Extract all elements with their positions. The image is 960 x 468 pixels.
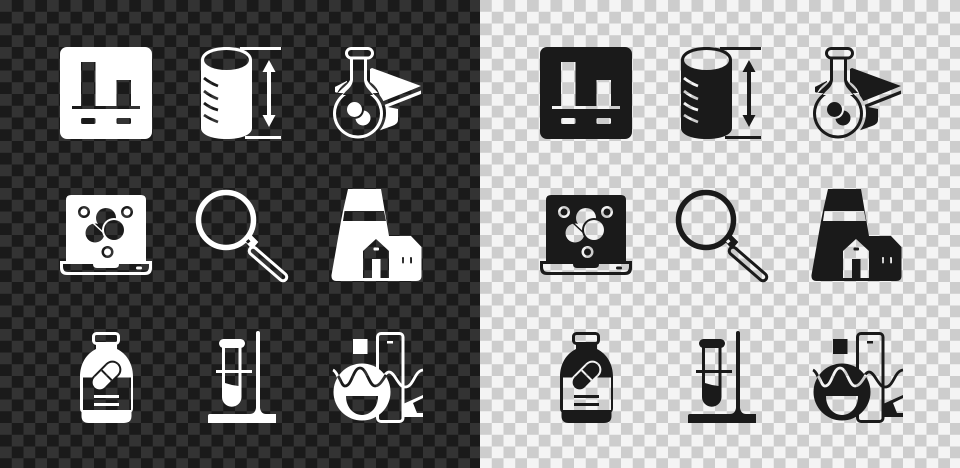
icon: cooling tower and plant, dark: [811, 189, 902, 281]
dark checkerboard panel: [0, 0, 480, 468]
icon: measuring cylinder with height arrow, dark: [681, 47, 761, 139]
icon: flask with graduation cap: [333, 47, 421, 138]
icon: medicine bottle: [80, 332, 133, 423]
icon: magnifying glass, dark: [676, 190, 768, 282]
icon: test tube on stand: [208, 331, 276, 423]
icon: magnifying glass: [196, 190, 288, 282]
light checkerboard panel: [480, 0, 960, 468]
icon: cooling tower and plant: [331, 189, 422, 281]
icon: test tube on stand, dark: [688, 331, 756, 423]
icon: laptop with molecules: [60, 195, 152, 275]
icon: bar chart tile, dark: [540, 47, 632, 139]
icon: laptop with molecules, dark: [540, 195, 632, 275]
icon: flask with wave, phone and plant: [332, 332, 424, 423]
icon: medicine bottle, dark: [560, 332, 613, 423]
icon: measuring cylinder with height arrow: [201, 47, 281, 139]
icon: flask with graduation cap, dark: [813, 47, 901, 138]
icon: flask with wave, phone and plant, dark: [812, 332, 904, 423]
icon: bar chart tile: [60, 47, 152, 139]
